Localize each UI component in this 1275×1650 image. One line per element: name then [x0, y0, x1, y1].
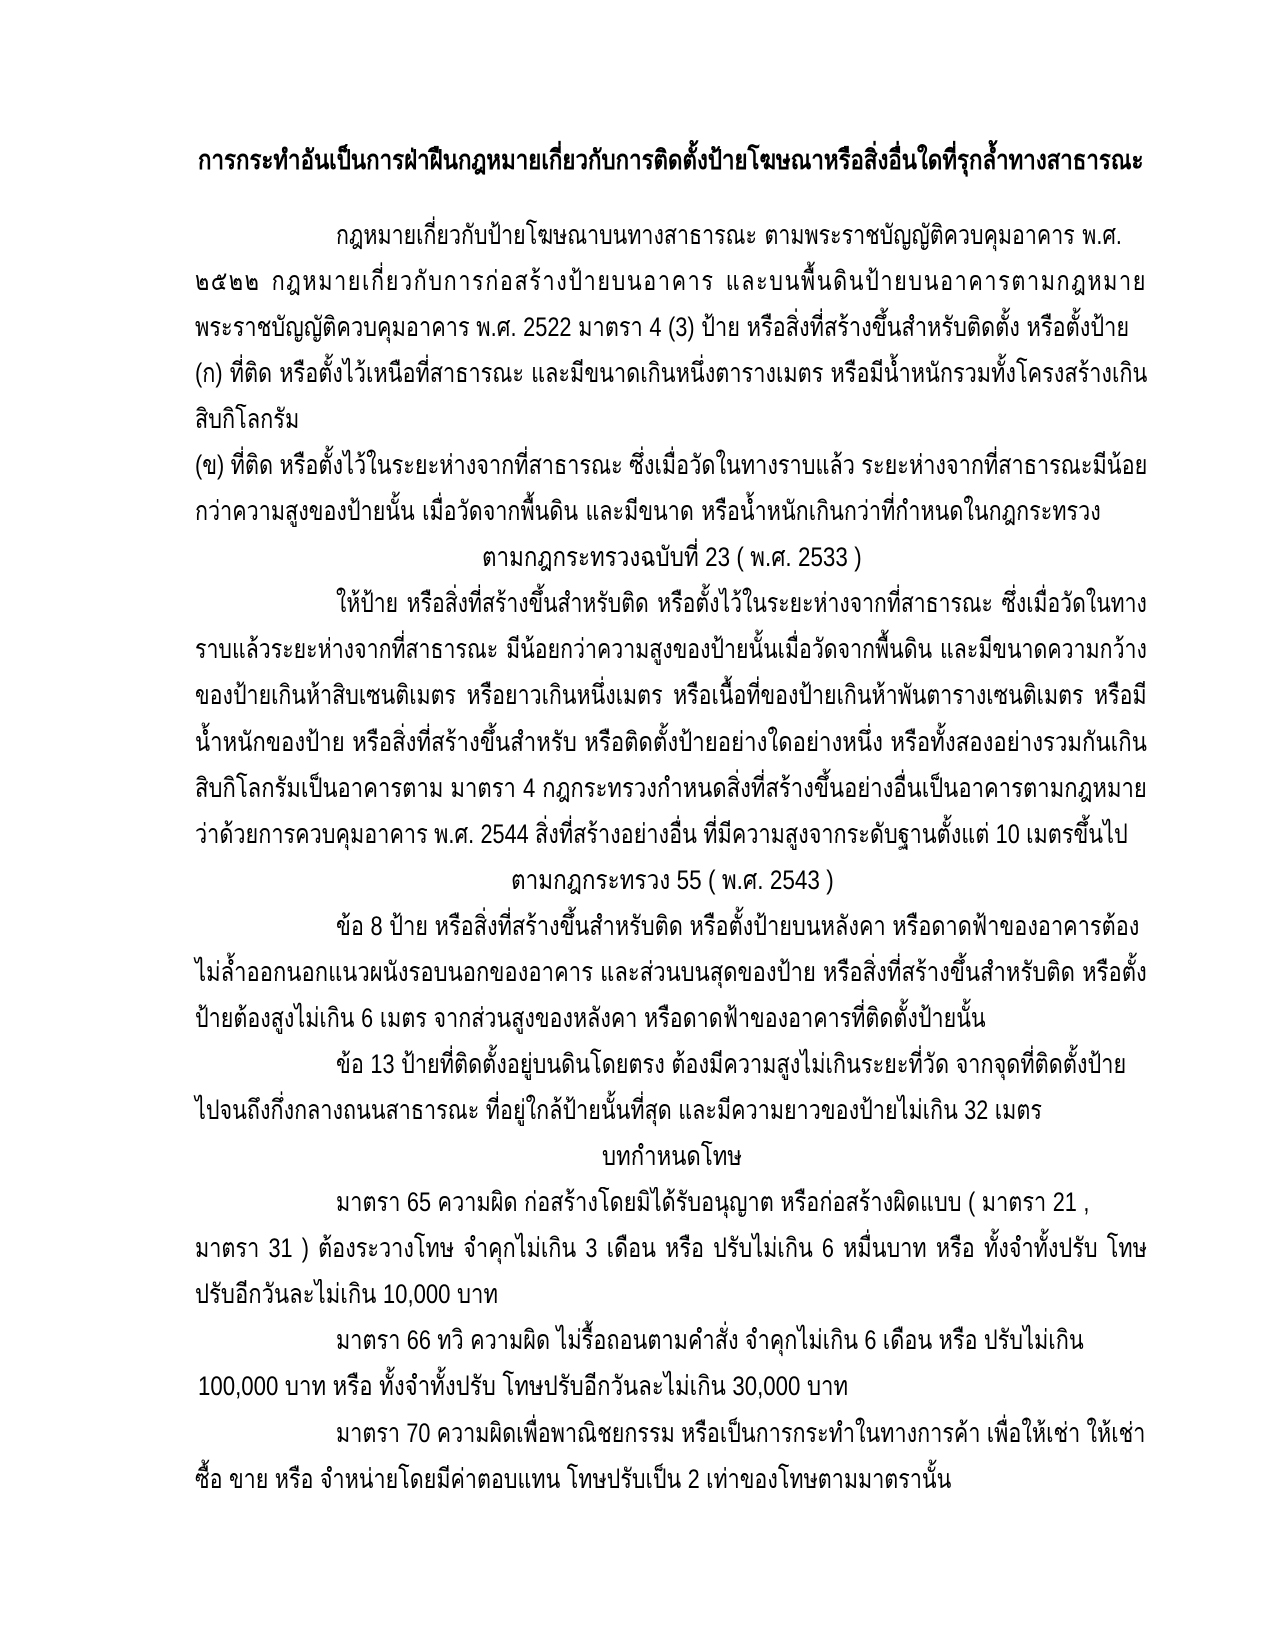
text block: sign size rules: น้ำหนักของป้าย หรือสิ่งที่สร้างขึ้นสำหรับ หรือติดตั้งป้ายอย่างใดอย่างหนึ่ง หรือทั้งสองอย่างรวมกันเกิน — [195, 726, 1147, 756]
text block: clause 13 — [194, 1044, 1126, 1126]
text block: section 70: มาตรา 70 ความผิดเพื่อพาณิชยกรรม หรือเป็นการกระทำในทางการค้า เพื่อให้เช่า ให้เช่า — [336, 1418, 1145, 1448]
text block: clause 8: ข้อ 8 ป้าย หรือสิ่งที่สร้างขึ้นสำหรับติด หรือตั้งป้ายบนหลังคา หรือดาดฟ้าของอาคารต้อง — [336, 911, 1139, 941]
text block: section 66 bis: มาตรา 66 ทวิ ความผิด ไม่รื้อถอนตามคำสั่ง จำคุกไม่เกิน 6 เดือน หรือ ปรับไม่เกิน — [336, 1325, 1084, 1355]
text block: section 65 — [195, 1187, 1147, 1309]
text block: sign law introduction: กฎหมายเกี่ยวกับป้ายโฆษณาบนทางสาธารณะ ตามพระราชบัญญัติควบคุมอาคาร พ.ศ. — [336, 220, 1122, 250]
text block: clause 13: ข้อ 13 ป้ายที่ติดตั้งอยู่บนดินโดยตรง ต้องมีความสูงไม่เกินระยะที่วัด จากจุดที่ติดตั้งป้าย — [336, 1049, 1126, 1079]
text block: sign law introduction: ๒๕๒๒ กฎหมายเกี่ยวกับการก่อสร้างป้ายบนอาคาร และบนพื้นดินป้ายบนอาคารตามกฎหมาย — [195, 266, 1147, 296]
text block: sign size rules: ของป้ายเกินห้าสิบเซนติเมตร หรือยาวเกินหนึ่งเมตร หรือเนื้อที่ของป้ายเกินห้าพันตารางเซนติเมตร หรือมี — [195, 680, 1147, 710]
text block: clause kho — [195, 446, 1147, 527]
text block: clause 13: ไปจนถึงกึ่งกลางถนนสาธารณะ ที่อยู่ใกล้ป้ายนั้นที่สุด และมีความยาวของป้ายไม่เกิน 32 เมตร — [195, 1095, 1042, 1125]
text block: clause 8 — [194, 906, 1147, 1034]
text block: sign law introduction: (ก) ที่ติด หรือตั้งไว้เหนือที่สาธารณะ และมีขนาดเกินหนึ่งตารางเมตร หรือมีน้ำหนักรวมทั้งโครงสร้างเกิน — [195, 358, 1147, 388]
heading: ministerial regulation 23: ตามกฎกระทรวงฉบับที่ 23 ( พ.ศ. 2533 ) — [482, 542, 862, 572]
text block: clause 8: ไม่ล้ำออกนอกแนวผนังรอบนอกของอาคาร และส่วนบนสุดของป้าย หรือสิ่งที่สร้างขึ้นสำหรับติด หรือตั้ง — [195, 957, 1147, 987]
text block: sign law introduction: พระราชบัญญัติควบคุมอาคาร พ.ศ. 2522 มาตรา 4 (3) ป้าย หรือสิ่งที่สร้างขึ้นสำหรับติดตั้ง หรือตั้งป้าย — [195, 312, 1129, 342]
text block: section 66 bis — [198, 1320, 1084, 1401]
text block: sign size rules: ให้ป้าย หรือสิ่งที่สร้างขึ้นสำหรับติด หรือตั้งไว้ในระยะห่างจากที่สาธารณะ ซึ่งเมื่อวัดในทาง — [336, 588, 1147, 618]
heading: penalties: บทกำหนดโทษ — [602, 1141, 742, 1171]
text block: sign law introduction: สิบกิโลกรัม — [195, 404, 299, 434]
text block: clause kho: (ข) ที่ติด หรือตั้งไว้ในระยะห่างจากที่สาธารณะ ซึ่งเมื่อวัดในทางราบแล้ว ระยะห่างจากที่สาธารณะมีน้อย — [195, 450, 1147, 480]
heading: ministerial regulation 55: ตามกฎกระทรวง 55 ( พ.ศ. 2543 ) — [511, 865, 834, 895]
text block: section 66 bis: 100,000 บาท หรือ ทั้งจำทั้งปรับ โทษปรับอีกวันละไม่เกิน 30,000 บาท — [198, 1371, 848, 1401]
text block: section 70: ซื้อ ขาย หรือ จำหน่ายโดยมีค่าตอบแทน โทษปรับเป็น 2 เท่าของโทษตามมาตรานั้น — [195, 1464, 951, 1494]
text block: section 70 — [195, 1414, 1145, 1494]
text block: clause 8: ป้ายต้องสูงไม่เกิน 6 เมตร จากส่วนสูงของหลังคา หรือดาดฟ้าของอาคารที่ติดตั้งป้ายนั้น — [195, 1003, 986, 1033]
text block: sign size rules — [195, 584, 1147, 850]
text block: section 65: ปรับอีกวันละไม่เกิน 10,000 บาท — [195, 1279, 498, 1309]
text block: clause kho: กว่าความสูงของป้ายนั้น เมื่อวัดจากพื้นดิน และมีขนาด หรือน้ำหนักเกินกว่าที่กำหนดในกฎกระทรวง — [195, 496, 1101, 526]
text block: section 65: มาตรา 31 ) ต้องระวางโทษ จำคุกไม่เกิน 3 เดือน หรือ ปรับไม่เกิน 6 หมื่นบาท หรือ ทั้งจำทั้งปรับ โทษ — [195, 1233, 1147, 1263]
title: การกระทำอันเป็นการฝ่าฝืนกฎหมายเกี่ยวกับการติดตั้งป้ายโฆษณาหรือสิ่งอื่นใดที่รุกล้ำทางสาธารณะ — [198, 144, 1144, 174]
text block: section 65: มาตรา 65 ความผิด ก่อสร้างโดยมิได้รับอนุญาต หรือก่อสร้างผิดแบบ ( มาตรา 21 , — [336, 1187, 1089, 1217]
text block: sign size rules: ว่าด้วยการควบคุมอาคาร พ.ศ. 2544 สิ่งที่สร้างอย่างอื่น ที่มีความสูงจากระดับฐานตั้งแต่ 10 เมตรขึ้นไป — [195, 819, 1128, 849]
text block: sign size rules: ราบแล้วระยะห่างจากที่สาธารณะ มีน้อยกว่าความสูงของป้ายนั้นเมื่อวัดจากพื้นดิน และมีขนาดความกว้าง — [195, 634, 1147, 664]
text block: sign law introduction — [195, 216, 1147, 434]
text block: sign size rules: สิบกิโลกรัมเป็นอาคารตาม มาตรา 4 กฎกระทรวงกำหนดสิ่งที่สร้างขึ้นอย่างอื่นเป็นอาคารตามกฎหมาย — [195, 773, 1147, 803]
